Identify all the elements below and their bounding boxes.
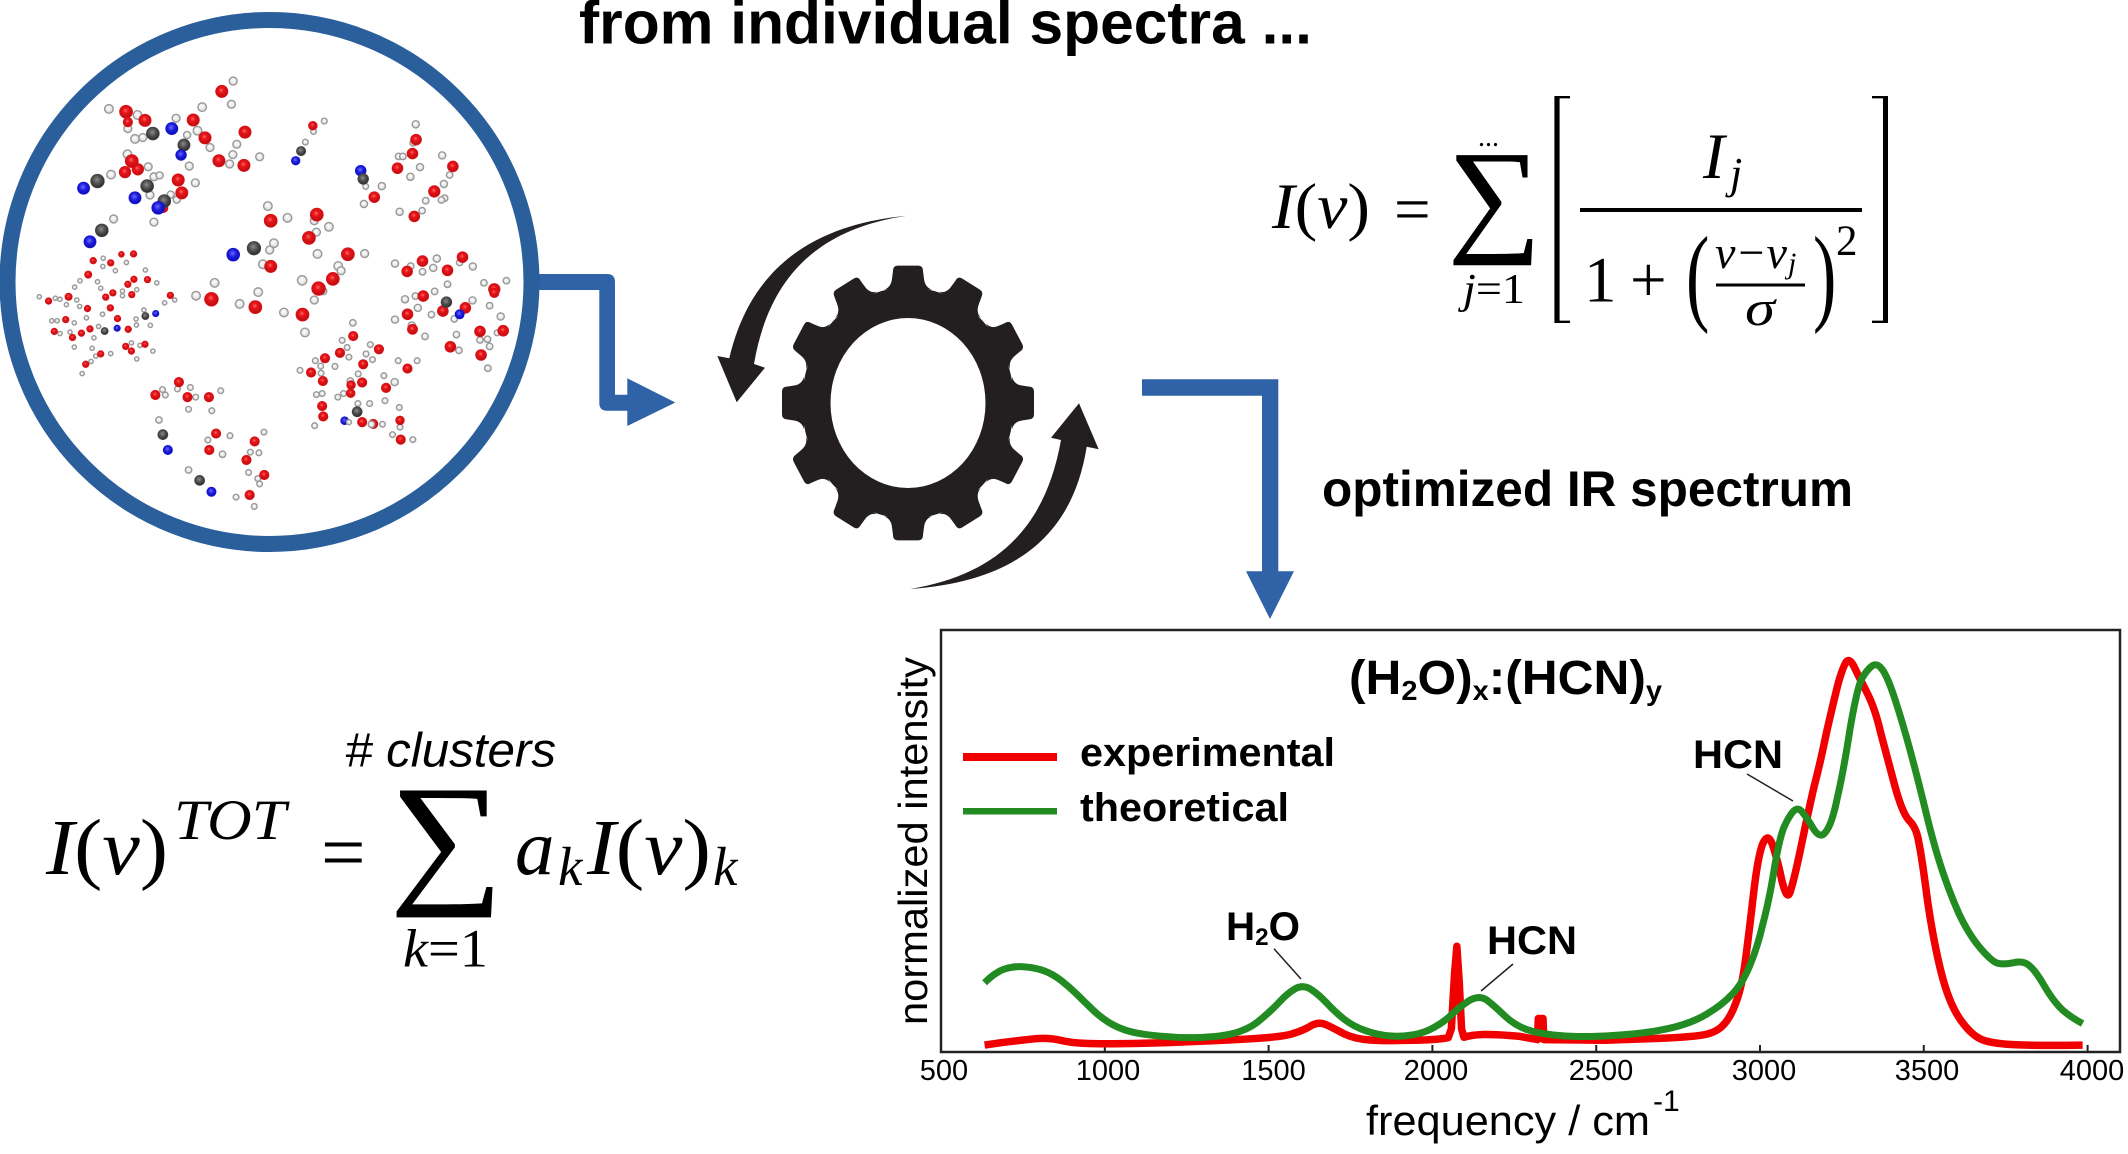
formula: individual spectrum: ) bbox=[1813, 215, 1836, 335]
sum sign: ∑ bbox=[390, 758, 503, 918]
cluster: left small bbox=[37, 251, 177, 376]
legend: theoretical: theoretical bbox=[1080, 786, 1289, 830]
x axis tick labels: 2500 bbox=[1569, 1055, 1633, 1087]
denominator: 1 bbox=[1584, 244, 1616, 316]
formula: individual spectrum: ν−ν bbox=[1715, 227, 1788, 278]
lower limit: j=1 bbox=[1457, 267, 1525, 313]
annotation: HCN high: HCN bbox=[1693, 733, 1783, 777]
x axis tick labels: 3500 bbox=[1895, 1055, 1959, 1087]
# clusters: # clusters bbox=[345, 724, 556, 778]
plot frame bbox=[941, 630, 2120, 1052]
plot title: y bbox=[1646, 675, 1662, 706]
x axis tick labels bbox=[920, 1055, 2124, 1087]
formula: individual spectrum: j bbox=[1784, 247, 1796, 280]
cluster: right bbox=[391, 252, 510, 371]
plot title: O) bbox=[1417, 652, 1473, 705]
panel: molecular clusters circle bbox=[8, 20, 675, 544]
formula: individual spectrum bbox=[1271, 96, 1888, 336]
right bracket bbox=[1872, 96, 1888, 323]
cluster: bottom middle bbox=[151, 378, 269, 509]
arrow: rotation top left bbox=[717, 216, 907, 402]
formula: individual spectrum: ( bbox=[1686, 215, 1709, 335]
x axis title: frequency / cm bbox=[1366, 1097, 1650, 1144]
curve: theoretical bbox=[985, 665, 2083, 1038]
lower limit: k=1 bbox=[403, 918, 488, 978]
equals: = bbox=[321, 810, 366, 897]
annotation: H2O: H bbox=[1226, 905, 1255, 949]
subtitle: optimized IR spectrum: optimized IR spectrum bbox=[1322, 461, 1853, 517]
x axis tick labels: 1000 bbox=[1076, 1055, 1140, 1087]
legend bbox=[963, 731, 1335, 830]
molecules bbox=[37, 77, 510, 509]
plot title: :(HCN) bbox=[1489, 652, 1646, 705]
superscript TOT: TOT bbox=[174, 789, 291, 852]
annotation: H2O: 2 bbox=[1255, 924, 1269, 951]
fraction bar bbox=[1580, 208, 1862, 212]
x axis title: -1 bbox=[1653, 1085, 1680, 1118]
annotation: H2O: O bbox=[1269, 905, 1300, 949]
arrow: gear to spectrum bbox=[1142, 379, 1294, 619]
a_k: a bbox=[515, 805, 554, 892]
annotation: HCN low bbox=[1481, 919, 1577, 991]
circle outline bbox=[8, 20, 532, 544]
formula: individual spectrum: + bbox=[1630, 244, 1667, 316]
icon: gear with rotation arrows bbox=[717, 216, 1099, 589]
numerator: I bbox=[1702, 121, 1728, 193]
y axis title: normalized intensity bbox=[890, 657, 936, 1025]
equals: = bbox=[1394, 174, 1431, 246]
legend: experimental: experimental bbox=[1080, 731, 1335, 775]
cluster: centre bbox=[192, 202, 369, 337]
curve: experimental bbox=[985, 660, 2083, 1045]
legend: theoretical bbox=[963, 786, 1289, 830]
formula: individual spectrum: 2 bbox=[1836, 218, 1858, 265]
annotation: HCN low: HCN bbox=[1487, 919, 1577, 963]
formula: total spectrum bbox=[45, 724, 739, 978]
chart: IR spectrum bbox=[890, 630, 2124, 1144]
cluster: top right bbox=[355, 121, 458, 222]
cluster: bottom right bbox=[297, 320, 420, 444]
x axis ticks bbox=[1105, 1045, 2088, 1052]
curves bbox=[985, 660, 2083, 1045]
left side: I(ν) bbox=[1271, 171, 1370, 243]
formula: individual spectrum: σ bbox=[1745, 280, 1778, 336]
left bracket bbox=[1554, 96, 1570, 323]
left side: I(ν) bbox=[45, 805, 168, 892]
I(v)_k: I(ν) bbox=[586, 805, 711, 892]
x axis tick labels: 3000 bbox=[1732, 1055, 1796, 1087]
x axis tick labels: 1500 bbox=[1241, 1055, 1306, 1087]
annotation: HCN high bbox=[1693, 733, 1793, 801]
gear hole bbox=[830, 318, 986, 488]
gear bbox=[782, 266, 1034, 540]
x axis tick labels: 500 bbox=[920, 1055, 968, 1087]
x axis tick labels: 2000 bbox=[1404, 1055, 1468, 1087]
formula: total spectrum: k bbox=[713, 836, 739, 897]
formula: individual spectrum: j bbox=[1725, 149, 1742, 198]
cluster: top left bbox=[78, 77, 264, 248]
annotation: H2O bbox=[1226, 905, 1301, 979]
plot title: (H bbox=[1349, 652, 1400, 705]
formula: total spectrum: k bbox=[558, 836, 584, 897]
upper limit: ... bbox=[1478, 122, 1499, 153]
x axis title bbox=[1366, 1085, 1680, 1144]
arrow: rotation bottom right bbox=[910, 403, 1099, 589]
sum sign: ∑ bbox=[1448, 127, 1541, 266]
cluster: top middle bbox=[291, 118, 327, 165]
arrow: circle to gear bbox=[537, 274, 675, 426]
plot title: 2 bbox=[1401, 675, 1417, 706]
plot title: x bbox=[1473, 675, 1489, 706]
legend: experimental bbox=[963, 731, 1335, 775]
x axis tick labels: 4000 bbox=[2060, 1055, 2124, 1087]
